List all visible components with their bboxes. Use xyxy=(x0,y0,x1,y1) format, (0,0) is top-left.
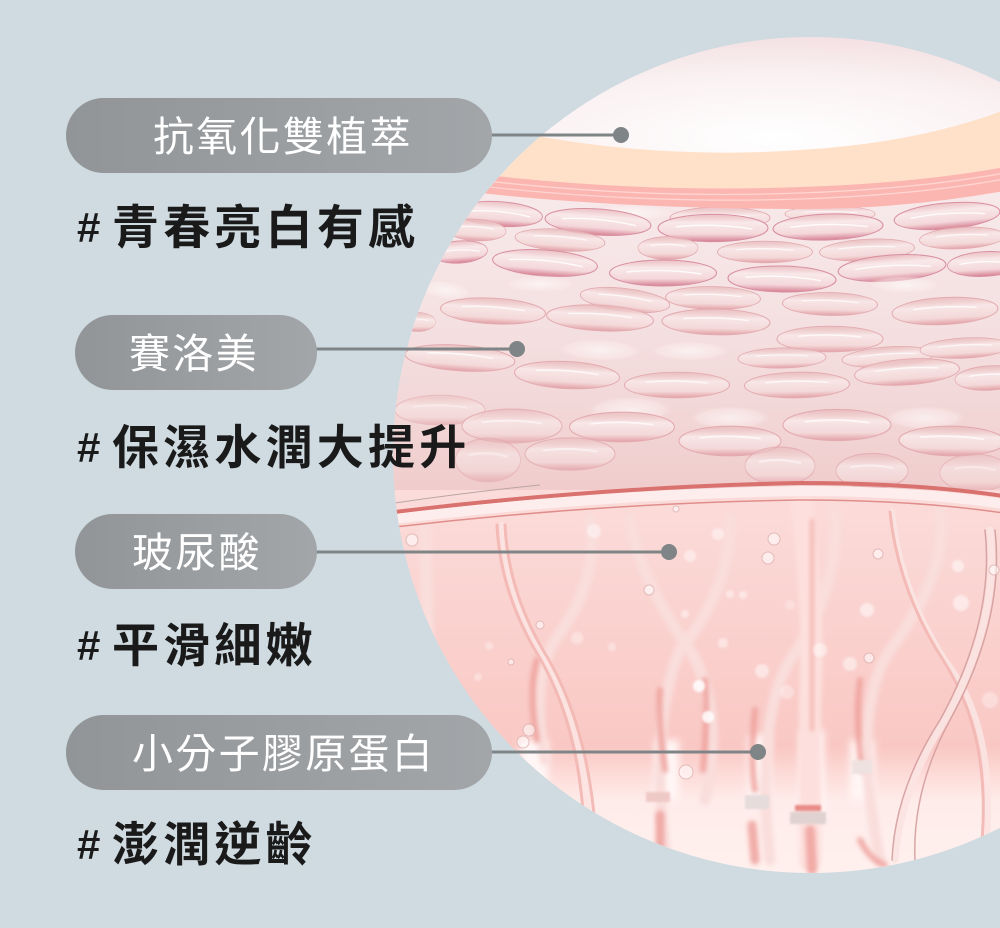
skin cross-section circle xyxy=(393,37,1000,873)
pill: 賽洛美 xyxy=(75,315,317,390)
pill: 抗氧化雙植萃: 抗氧化雙植萃 xyxy=(153,114,413,160)
tag: 澎潤逆齡: 澎潤逆齡 xyxy=(112,818,317,871)
peach layer xyxy=(480,112,1000,199)
dome: outer surface xyxy=(502,37,1000,174)
tag: 保濕水潤大提升: 保濕水潤大提升 xyxy=(112,421,470,474)
bubbles xyxy=(474,524,998,723)
hair-base collars xyxy=(646,760,872,824)
pill: 玻尿酸: 玻尿酸 xyxy=(132,530,262,576)
tag: 澎潤逆齡: # xyxy=(77,821,100,868)
tag: 青春亮白有感: 青春亮白有感 xyxy=(112,201,419,254)
pill: 賽洛美: 賽洛美 xyxy=(129,331,259,377)
basement membrane xyxy=(395,483,1000,527)
pill: 抗氧化雙植萃 xyxy=(66,98,492,173)
lower dermis xyxy=(385,490,1000,880)
tag: 青春亮白有感: # xyxy=(77,204,100,251)
middle layer with cells xyxy=(385,190,1000,515)
stratified pink band xyxy=(485,168,1000,209)
tag: 平滑細嫩: 平滑細嫩 xyxy=(112,619,317,672)
pill: 玻尿酸 xyxy=(75,514,317,589)
pill: 小分子膠原蛋白 xyxy=(66,715,492,790)
strands xyxy=(425,505,997,870)
tag: 保濕水潤大提升: # xyxy=(77,424,100,471)
pill: 小分子膠原蛋白: 小分子膠原蛋白 xyxy=(132,731,435,777)
tag: 平滑細嫩: # xyxy=(77,622,100,669)
